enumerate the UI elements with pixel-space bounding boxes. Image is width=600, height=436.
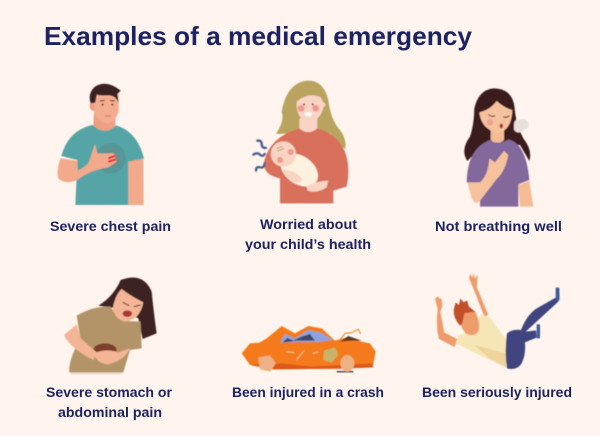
label: been seriously injured: Been seriously injured <box>422 384 572 400</box>
icon: car wheels <box>258 355 354 372</box>
illustration: woman with stomach pain <box>64 278 157 374</box>
icon: breath puff <box>514 119 529 132</box>
label: severe chest pain: Severe chest pain <box>50 218 171 234</box>
illustration: man with chest pain <box>58 84 144 205</box>
label: worried about your child's health: Worried about <box>260 216 357 232</box>
label: severe stomach or abdominal pain: abdominal pain <box>58 404 162 420</box>
label: worried about your child's health: your child’s health <box>245 236 371 252</box>
illustration: woman short of breath <box>464 88 533 207</box>
illustration: man falling <box>435 273 560 369</box>
label: worried about your child's health <box>245 216 371 252</box>
illustration: crashed car <box>242 326 376 372</box>
title: Examples of a medical emergency <box>44 21 473 51</box>
label: been injured in a crash: Been injured in a crash <box>232 384 384 400</box>
label: not breathing well: Not breathing well <box>435 218 562 234</box>
illustration: mother holding unwell child <box>253 81 348 203</box>
label: severe stomach or abdominal pain: Severe stomach or <box>46 384 173 400</box>
icon: distress squiggles <box>253 141 266 171</box>
label: severe stomach or abdominal pain <box>46 384 173 420</box>
